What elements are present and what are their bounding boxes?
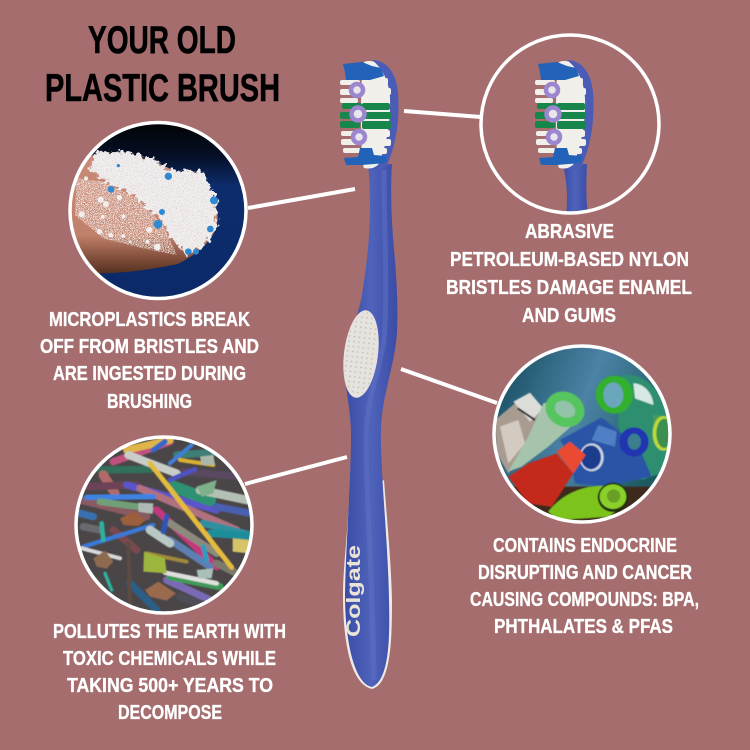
loose grains <box>79 176 161 250</box>
text: pollution: TOXIC CHEMICALS WHILE <box>63 648 276 670</box>
text: pollution: TAKING 500+ YEARS TO <box>67 675 273 697</box>
text: compounds <box>470 535 699 638</box>
text: microplastics: BRUSHING <box>107 391 192 413</box>
handle white edge <box>343 480 392 689</box>
text: microplastics: OFF FROM BRISTLES AND <box>40 336 259 358</box>
text: bristles <box>446 221 692 327</box>
text: bristles: ABRASIVE <box>525 221 614 243</box>
text: compounds: CAUSING COMPOUNDS: BPA, <box>470 589 699 611</box>
text: pollution <box>53 621 286 724</box>
title: PLASTIC BRUSH <box>45 67 280 110</box>
circle inset: bristles close-up <box>481 35 659 216</box>
circle photo: microplastics on fingertip <box>60 120 248 302</box>
toothbrush <box>339 60 399 689</box>
connector: compounds <box>401 369 497 403</box>
text: microplastics <box>40 309 259 413</box>
text: microplastics: MICROPLASTICS BREAK <box>49 309 250 331</box>
scattered grains texture <box>75 178 177 255</box>
leaves and flat scraps <box>93 455 250 601</box>
powder shadow specks <box>88 152 217 255</box>
text: compounds: DISRUPTING AND CANCER <box>478 562 692 584</box>
connector: bristles <box>404 111 481 117</box>
thumb grip <box>339 308 383 400</box>
text: pollution: DECOMPOSE <box>118 702 222 724</box>
title: YOUR OLD <box>88 19 236 62</box>
text: pollution: POLLUTES THE EARTH WITH <box>53 621 286 643</box>
text: bristles: BRISTLES DAMAGE ENAMEL <box>446 277 692 299</box>
handle <box>345 164 397 687</box>
text: microplastics: ARE INGESTED DURING <box>53 363 246 385</box>
handle highlight <box>366 170 386 680</box>
brush head <box>340 60 399 170</box>
text: bristles: PETROLEUM-BASED NYLON <box>450 249 689 271</box>
connector: microplastics <box>248 189 355 208</box>
text: compounds: CONTAINS ENDOCRINE <box>493 535 677 557</box>
text: bristles: AND GUMS <box>522 305 616 327</box>
powder mass <box>88 152 217 255</box>
title <box>45 19 280 110</box>
blue plastic beads <box>108 164 218 255</box>
brand name: Colgate <box>344 545 365 637</box>
connector: pollution <box>245 457 347 484</box>
circle photo: discarded toothbrush pile <box>74 435 256 617</box>
circle photo: plastic bottles <box>492 344 674 524</box>
text: compounds: PHTHALATES & PFAS <box>494 616 673 638</box>
